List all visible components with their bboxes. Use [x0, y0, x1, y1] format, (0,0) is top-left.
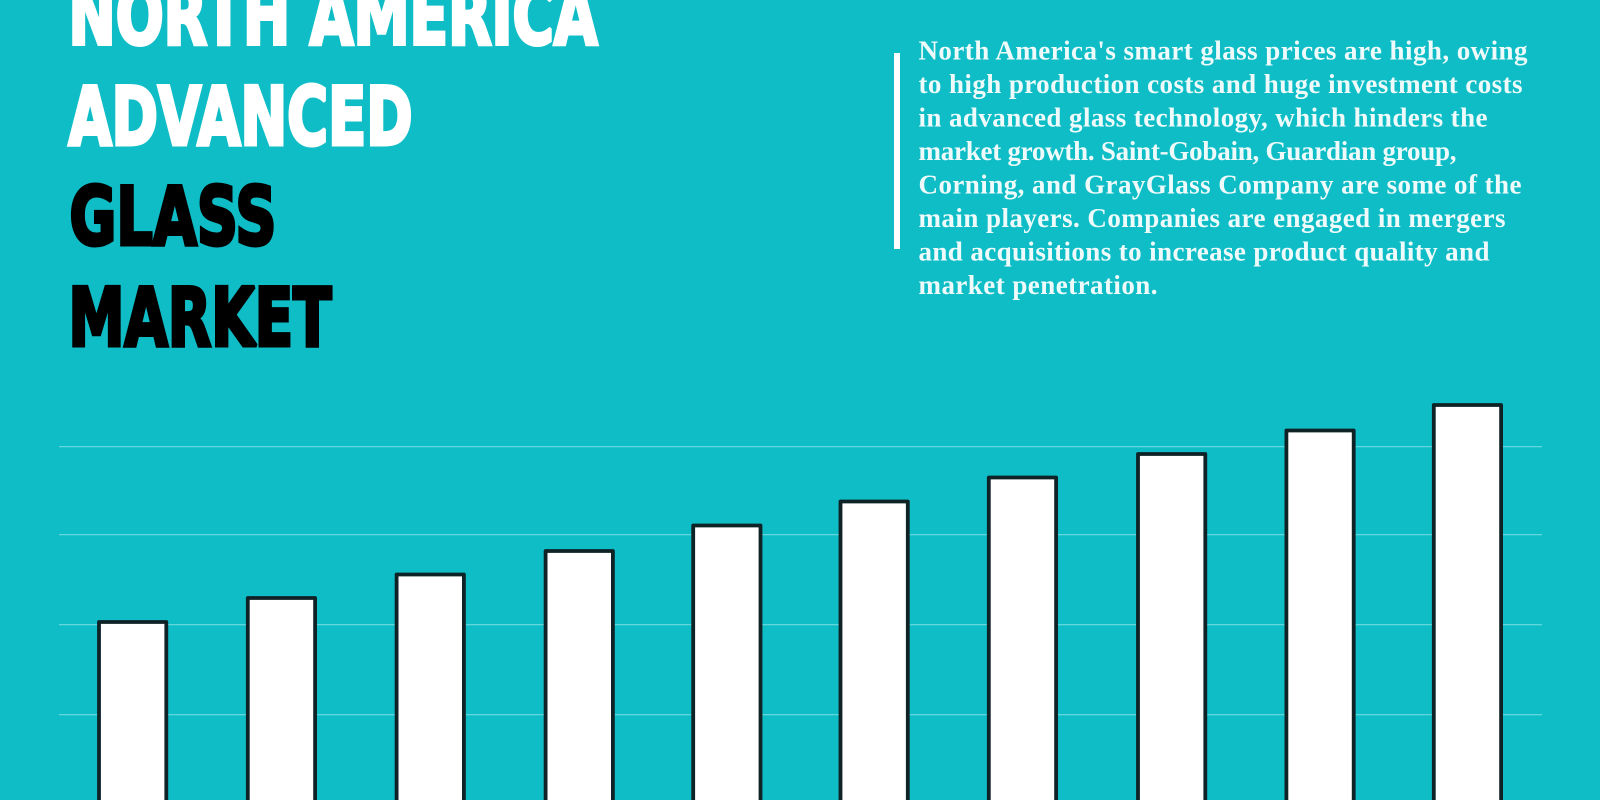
bar 9	[1286, 430, 1354, 800]
description text block: to high production costs and huge investment costs	[918, 69, 1522, 99]
title line: Glass: GLASS	[70, 170, 276, 264]
title	[68, 0, 598, 364]
bar 3	[397, 574, 464, 800]
bar chart	[59, 405, 1542, 800]
description text block: main players. Companies are engaged in mergers	[918, 203, 1506, 233]
bar 4	[546, 551, 613, 800]
title line: Advanced: ADVANCED	[68, 70, 412, 164]
title line: Market: MARKET	[68, 272, 332, 364]
description text block: in advanced glass technology, which hinders the	[918, 102, 1488, 132]
accent bar beside description	[894, 53, 900, 249]
bar 5	[693, 526, 760, 800]
description text block: and acquisitions to increase product quality and	[918, 236, 1490, 266]
description text block: market growth. Saint-Gobain, Guardian group,	[918, 136, 1456, 166]
description text block	[918, 36, 1528, 300]
bar 10	[1434, 405, 1501, 800]
description text block: Corning, and GrayGlass Company are some of the	[918, 170, 1522, 200]
bar 1	[99, 622, 166, 800]
bar 6	[840, 502, 908, 800]
description text block: North America's smart glass prices are high, owing	[918, 36, 1528, 66]
bar 8	[1138, 454, 1205, 800]
description text block: market penetration.	[918, 270, 1158, 300]
bar 7	[989, 478, 1056, 800]
bar 2	[248, 598, 315, 800]
